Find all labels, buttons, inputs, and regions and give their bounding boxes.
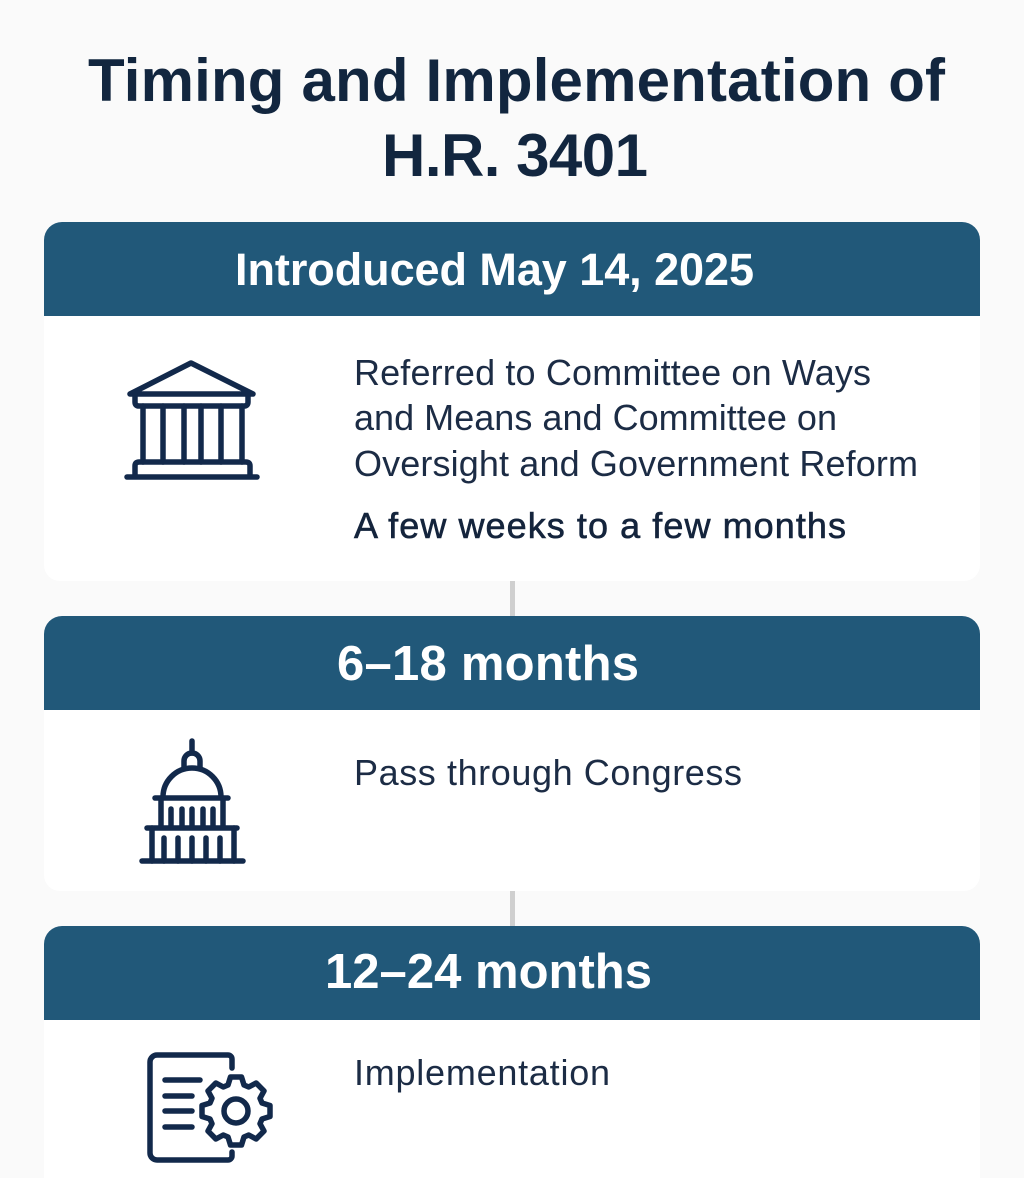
panel header: 6–18 months	[44, 616, 980, 710]
panel: 6–18 months	[44, 616, 980, 891]
panel header: introduced	[44, 222, 980, 316]
panel body: 12–24 months	[44, 1000, 980, 1178]
text: referral duration: A few weeks to a few months	[354, 505, 846, 546]
panel header: introduced: Introduced May 14, 2025	[235, 244, 754, 295]
connector: first to second step	[510, 581, 515, 616]
text: committee referral: Referred to Committee on Ways	[354, 352, 871, 393]
title: H.R. 3401	[382, 122, 648, 189]
panel header: 12–24 months	[44, 926, 980, 1020]
icon: capitol dome	[142, 741, 243, 861]
connector: second to third step	[510, 891, 515, 926]
text: committee referral	[354, 352, 918, 484]
panel body: 6–18 months	[44, 690, 980, 891]
icon: document with gear	[150, 1055, 270, 1160]
panel header: 12–24 months: 12–24 months	[325, 945, 652, 999]
text: pass through congress: Pass through Congress	[354, 752, 742, 793]
text: committee referral: and Means and Committee on	[354, 397, 837, 438]
panel: 12–24 months	[44, 926, 980, 1178]
title	[88, 47, 946, 189]
text: implementation: Implementation	[354, 1052, 610, 1093]
panel body: introduced	[44, 300, 980, 581]
title: Timing and Implementation of	[88, 47, 946, 114]
panel: introduced	[44, 222, 980, 581]
panel header: 6–18 months: 6–18 months	[337, 637, 639, 691]
icon: government building	[127, 363, 257, 477]
text: committee referral: Oversight and Government Reform	[354, 443, 918, 484]
